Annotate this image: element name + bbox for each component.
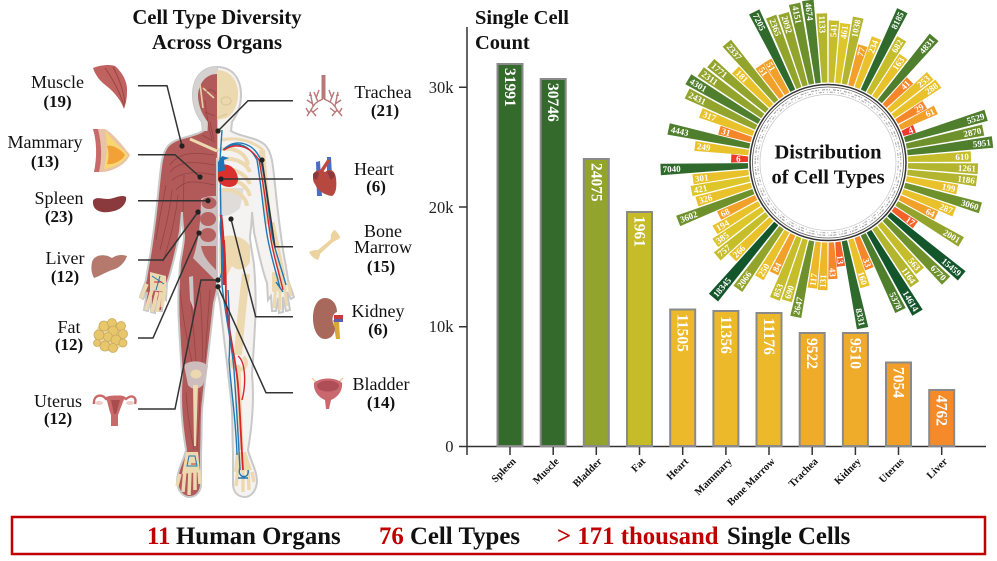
- category labels: Liver: [925, 456, 950, 481]
- radial bars, left half: 68: [719, 206, 732, 219]
- bar values: 31991: [501, 68, 518, 107]
- radial chart: distribution of cell types: [660, 0, 993, 329]
- radial bars, left half: 250: [756, 261, 772, 278]
- radial bars, left half: 84: [770, 261, 784, 273]
- radial bars, right half: 13: [835, 255, 846, 265]
- bar values: 24075: [587, 163, 604, 202]
- bar values: 11505: [674, 314, 691, 352]
- leader lines and dots: [138, 86, 293, 409]
- label: muscle: Muscle: [31, 72, 84, 92]
- radial bars, left half: 317: [701, 109, 718, 124]
- radial bars, right half: 8331: [854, 307, 867, 327]
- label: kidney: Kidney: [352, 301, 404, 321]
- icon: uterus: [94, 396, 135, 426]
- bar chart: single cell count: [429, 7, 986, 508]
- label: liver: (12): [51, 267, 79, 286]
- bar chart heading: Count: [475, 32, 530, 54]
- radial bars, left half: 2092: [779, 14, 794, 35]
- radial bars, right half: 199: [941, 181, 957, 194]
- radial bars, right half: 29: [913, 101, 926, 115]
- label: spleen: Spleen: [34, 188, 84, 208]
- summary box: [12, 517, 985, 554]
- label: mammary: Mammary: [8, 132, 82, 152]
- category labels: Fat: [630, 456, 648, 475]
- radial bars, left half: 4151: [790, 5, 804, 25]
- radial bars, right half: 8185: [889, 10, 906, 31]
- summary text: Cell Types: [410, 523, 520, 550]
- radial bars, right half: 2870: [963, 125, 983, 139]
- icon: bladder: [312, 378, 343, 409]
- label: kidney: (6): [368, 320, 388, 339]
- category labels: Muscle: [531, 456, 562, 487]
- icon: mammary: [93, 129, 130, 172]
- label: liver: Liver: [46, 248, 84, 268]
- bar values: 7054: [890, 367, 906, 398]
- label: uterus: (12): [44, 409, 72, 428]
- y axis labels: 10k: [429, 317, 454, 336]
- radial bars, left half: 3602: [679, 209, 699, 225]
- category labels: Kidney: [833, 456, 864, 487]
- y axis labels: 0: [445, 437, 454, 456]
- radial bars, left half: 2647: [791, 296, 805, 316]
- category labels: Trachea: [787, 456, 821, 490]
- category labels: Bladder: [571, 456, 605, 490]
- radial bars, right half: 461: [838, 24, 850, 40]
- muscle fibres: [156, 100, 215, 450]
- left hand and foot bones: [141, 284, 165, 312]
- radial bars, left half: 853: [771, 282, 785, 298]
- summary text: 11: [147, 523, 170, 550]
- radial bars, right half: 2001: [941, 227, 962, 245]
- radial bars, left half: 326: [698, 192, 714, 206]
- category labels: Heart: [665, 456, 691, 483]
- radial bars, right half: 1186: [957, 174, 976, 186]
- radial bars, right half: 160: [856, 270, 869, 287]
- bar values: 9510: [846, 338, 863, 369]
- label: heart: Heart: [354, 159, 394, 179]
- icon: liver: [91, 255, 127, 278]
- radial bars, right half: 64: [924, 206, 937, 219]
- summary text: Human Organs: [176, 523, 341, 550]
- radial bars, right half: 253: [915, 73, 932, 90]
- category labels: Spleen: [490, 456, 519, 485]
- radial bars, right half: 5529: [966, 111, 986, 126]
- radial bars, right half: 4831: [917, 35, 937, 56]
- icon: bone marrow: [309, 230, 340, 260]
- radial bars, left half: 4301: [688, 76, 709, 94]
- radial bars, right half: 234: [866, 38, 880, 55]
- radial bars, right half: 288: [923, 80, 940, 97]
- category labels: Bone Marrow: [726, 456, 778, 508]
- title: cell type diversity: Cell Type Diversity: [132, 7, 302, 29]
- radial bars, left half: 2337: [725, 42, 744, 62]
- radial bars, left half: 18345: [711, 275, 734, 299]
- bar values: 9522: [803, 338, 820, 369]
- radial bars, right half: 1261: [958, 163, 977, 174]
- summary text: Single Cells: [727, 523, 851, 550]
- label: uterus: Uterus: [34, 391, 82, 411]
- radial bars, left half: 2311: [700, 69, 720, 88]
- chart title: Distribution: [774, 142, 882, 164]
- radial bars, right half: 41: [899, 78, 912, 92]
- radial bars, left half: 181: [734, 68, 751, 85]
- bar values: 11356: [717, 316, 734, 354]
- chart title: of Cell Types: [771, 166, 885, 188]
- icon: kidney: [313, 298, 343, 339]
- bar values: 11176: [760, 318, 777, 355]
- radial bars, right half: 33: [861, 257, 874, 269]
- radial bars, right half: 682: [890, 38, 905, 55]
- icon: fat: [94, 318, 128, 352]
- radial bars, left half: 1771: [709, 61, 730, 80]
- radial bars, left half: 51: [764, 60, 778, 74]
- radial bars, left half: 131: [818, 274, 828, 288]
- summary text: 76: [379, 523, 404, 550]
- radial bars, right half: 17: [904, 214, 917, 228]
- radial bars, left half: 117: [808, 272, 819, 287]
- bar values: [501, 68, 950, 426]
- label: bone marrow: Marrow: [354, 237, 412, 257]
- radial bars, right half: 1164: [899, 265, 918, 286]
- icon: heart: [313, 157, 336, 196]
- category labels: Uterus: [877, 456, 907, 486]
- head hood and skull: [193, 67, 217, 131]
- bar chart heading: Single Cell: [475, 7, 569, 29]
- icon: trachea: [306, 75, 342, 116]
- label: fat: Fat: [57, 317, 81, 337]
- bar values: 4762: [933, 395, 950, 426]
- radial bars, left half: 7040: [662, 164, 681, 174]
- radial bars, right half: 541: [828, 23, 839, 37]
- label: bone marrow: Bone: [364, 221, 402, 241]
- radial bars, right half: 610: [955, 152, 970, 162]
- icon: spleen: [93, 196, 126, 212]
- radial bars, right half: 14614: [901, 289, 921, 314]
- radial bars, right half: 5378: [887, 291, 904, 312]
- y axis labels: 30k: [429, 78, 454, 97]
- bars: [498, 64, 954, 446]
- radial bars, left half: 4674: [803, 2, 815, 22]
- central heart: [218, 165, 238, 187]
- radial bars, right half: 163: [890, 55, 907, 72]
- axes: [459, 27, 986, 455]
- radial bars, left half: 194: [714, 217, 731, 233]
- central ring: [750, 84, 906, 240]
- radial bars, right half: 1038: [849, 18, 863, 38]
- label: muscle: (19): [43, 92, 72, 111]
- label: fat: (12): [55, 335, 83, 354]
- radial bars, left half: 6: [736, 154, 741, 164]
- title: cell type diversity: Across Organs: [152, 32, 282, 54]
- radial bars, left half: 2365: [767, 17, 783, 38]
- radial bars, left half: 301: [694, 172, 710, 184]
- label: bone marrow: (15): [367, 257, 395, 276]
- category labels: Mammary: [693, 456, 735, 498]
- radial bars, right half: 3060: [960, 197, 980, 212]
- radial bars, left half: 4443: [670, 125, 690, 138]
- radial bars, right half: 61: [924, 106, 937, 119]
- icon: muscle: [93, 65, 127, 109]
- right skeleton: [219, 188, 244, 216]
- radial bars, right half: 77: [855, 46, 867, 58]
- radial bars, right half: 4: [907, 125, 915, 136]
- radial bars, left half: 421: [693, 183, 709, 195]
- label: heart: (6): [366, 177, 386, 196]
- category labels: [490, 456, 950, 508]
- radial bars, left half: [660, 0, 830, 318]
- y axis labels: [429, 78, 454, 456]
- radial bars, left half: 385: [714, 230, 731, 246]
- radial bars, right half: 287: [938, 201, 955, 216]
- radial bars, right half: [826, 8, 993, 329]
- clavicle and abdomen: [190, 139, 217, 151]
- radial bars, left half: 266: [731, 243, 748, 260]
- bar values: 1961: [630, 216, 648, 247]
- label: mammary: (13): [31, 152, 59, 171]
- radial bars, left half: 249: [696, 141, 712, 153]
- radial bars, left half: 51: [757, 65, 770, 79]
- summary text: > 171 thousand: [557, 523, 719, 550]
- radial bars, left half: 7205: [751, 12, 768, 33]
- radial bars, left half: 2066: [735, 269, 754, 290]
- radial bars, left half: 1133: [817, 15, 828, 34]
- label: trachea: (21): [371, 101, 399, 120]
- radial bars, right half: 15459: [940, 256, 964, 279]
- label: bladder: (14): [367, 393, 395, 412]
- label: bladder: Bladder: [353, 374, 409, 394]
- radial bars, left half: 757: [716, 242, 733, 259]
- radial bars, right half: 563: [906, 256, 923, 273]
- radial bars, right half: 5951: [972, 137, 992, 149]
- anatomical body figure: [140, 67, 294, 497]
- radial bars, right half: 43: [827, 268, 838, 278]
- radial bars, left half: 690: [783, 284, 796, 300]
- radial bars, right half: 6770: [928, 263, 949, 283]
- bar values: 30746: [544, 83, 561, 122]
- vessels: [220, 130, 286, 478]
- radial bars, left half: 31: [720, 126, 732, 138]
- radial bars, left half: 2431: [687, 90, 708, 107]
- y axis labels: 20k: [429, 198, 454, 217]
- label: trachea: Trachea: [354, 82, 412, 102]
- label: spleen: (23): [45, 207, 73, 226]
